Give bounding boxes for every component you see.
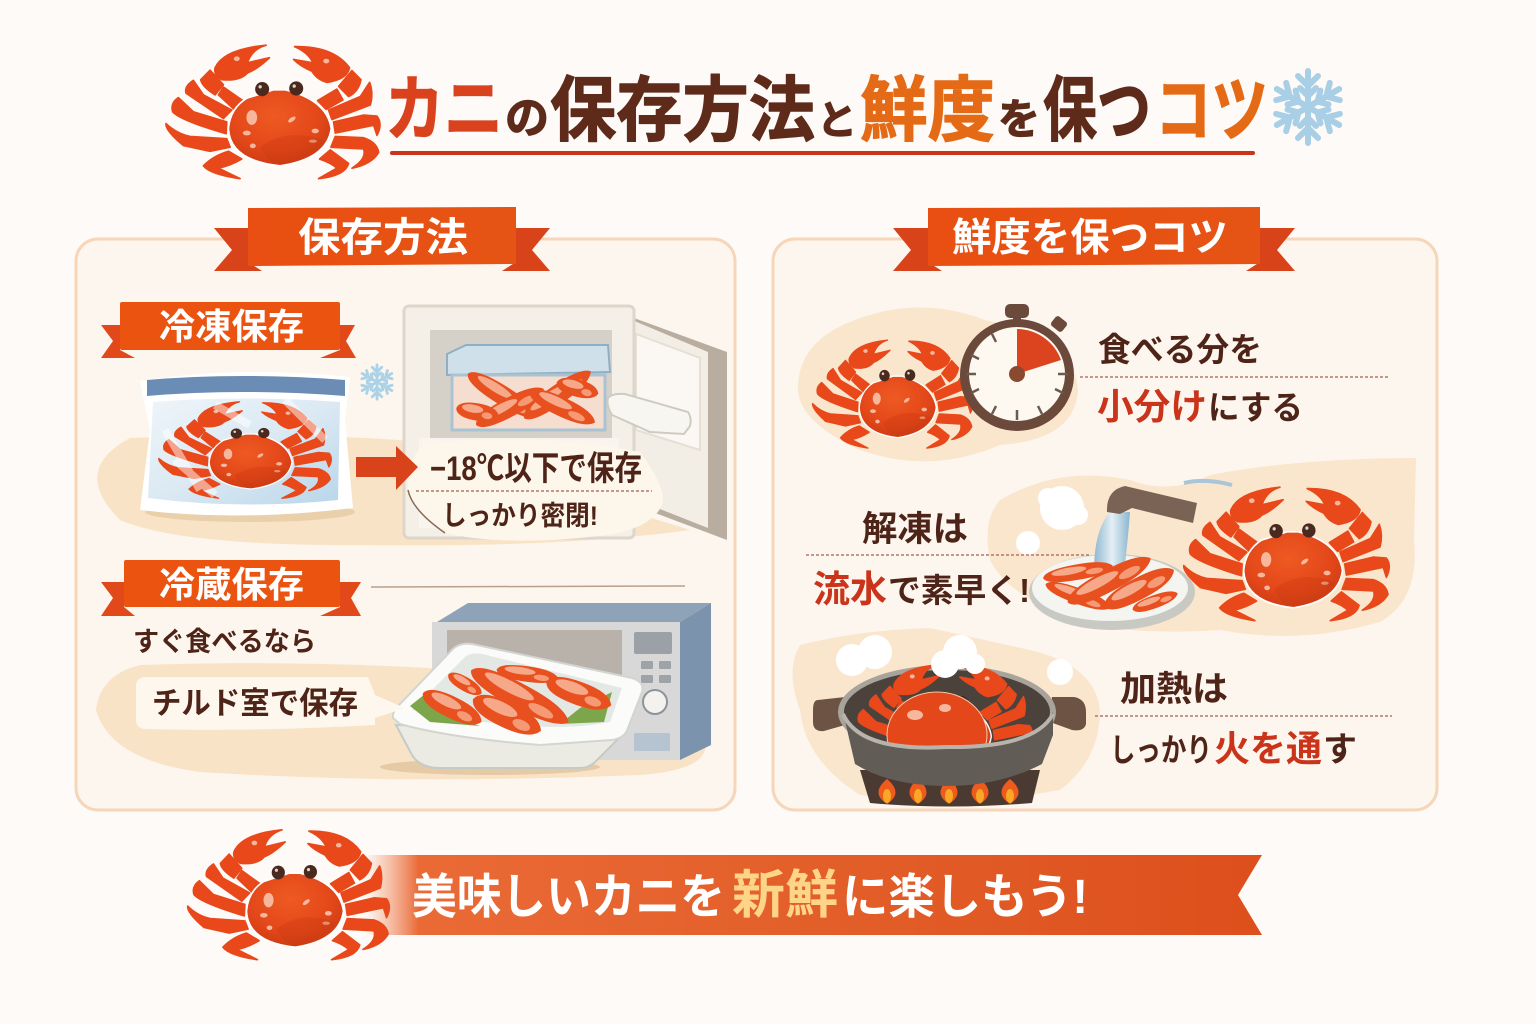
peach background: refrigeration (96, 663, 706, 779)
tip 2 text (806, 510, 1090, 610)
bottom banner (365, 855, 1262, 935)
title crab icon (166, 45, 380, 179)
tip 1 text: 食べる分を (1098, 331, 1262, 368)
bottom banner: 新鮮 (732, 867, 838, 925)
tip 2 text: で素早く! (888, 572, 1030, 609)
panel: keeping freshness tips (773, 207, 1437, 810)
title: の (505, 94, 549, 143)
ribbon heading: freshness tips: 鮮度を保つコツ (952, 217, 1228, 260)
tip 3: blob, steaming pot on burner (792, 628, 1100, 806)
callout: chilled compartment (136, 677, 405, 730)
callout: freezing instructions (408, 440, 663, 541)
tip 1 text: にする (1208, 389, 1303, 426)
tip 2: blob, faucet, plate and crab (988, 458, 1416, 636)
title: を (998, 96, 1040, 143)
title (385, 71, 1268, 151)
peach background: freezing (97, 435, 690, 545)
title: 保つ (1043, 72, 1151, 151)
title: コツ (1155, 72, 1268, 151)
ribbon heading: storage methods: 保存方法 (298, 216, 468, 260)
ribbon: frozen storage (101, 302, 356, 358)
panel: storage methods (76, 207, 735, 810)
ribbon heading: storage methods (214, 207, 550, 271)
tip 2 text: 流水 (813, 569, 887, 610)
icon: crab legs in chilled tray (380, 644, 643, 775)
icon: microwave (432, 603, 711, 760)
tip 2 text: 解凍は (862, 510, 968, 549)
tip 3 text: しっかり (1110, 732, 1212, 768)
callout: freezing instructions: −18℃以下で保存 (430, 450, 642, 488)
tip 3 text: す (1323, 731, 1357, 769)
bottom crab icon (188, 830, 389, 960)
ribbon: frozen storage: 冷凍保存 (159, 306, 304, 347)
text: if eating soon: すぐ食べるなら (133, 627, 316, 657)
tip 1 text (1080, 331, 1390, 427)
title: 鮮度 (860, 72, 995, 151)
title: 保存方法 (550, 72, 815, 151)
tip 1: blob, crab and stopwatch (798, 304, 1078, 461)
title underline (390, 151, 1255, 155)
callout: freezing instructions: しっかり密閉! (442, 501, 598, 531)
panel frame left (76, 239, 735, 810)
ribbon: refrigerated storage (101, 560, 361, 616)
ribbon: refrigerated storage: 冷蔵保存 (159, 564, 304, 605)
icon: open freezer with container (404, 306, 727, 540)
tip 3 text: 加熱は (1120, 670, 1228, 709)
tip 3 text (1095, 670, 1392, 769)
tip 3 text: 火を通 (1214, 728, 1322, 769)
callout: chilled compartment: チルド室で保存 (152, 686, 358, 721)
icon: frozen crab in zip bag (140, 372, 355, 522)
ribbon heading: freshness tips (893, 207, 1295, 271)
title: カニ (385, 71, 503, 150)
tip 1 text: 小分け (1097, 386, 1207, 427)
bottom banner: 美味しいカニを (412, 871, 725, 924)
panel frame right (773, 239, 1437, 810)
icon: small snowflake (360, 365, 394, 399)
title: と (817, 99, 857, 143)
arrow: to freezer (356, 446, 418, 490)
icon: title snowflake (1272, 71, 1344, 143)
bottom banner: に楽しもう! (842, 871, 1088, 924)
